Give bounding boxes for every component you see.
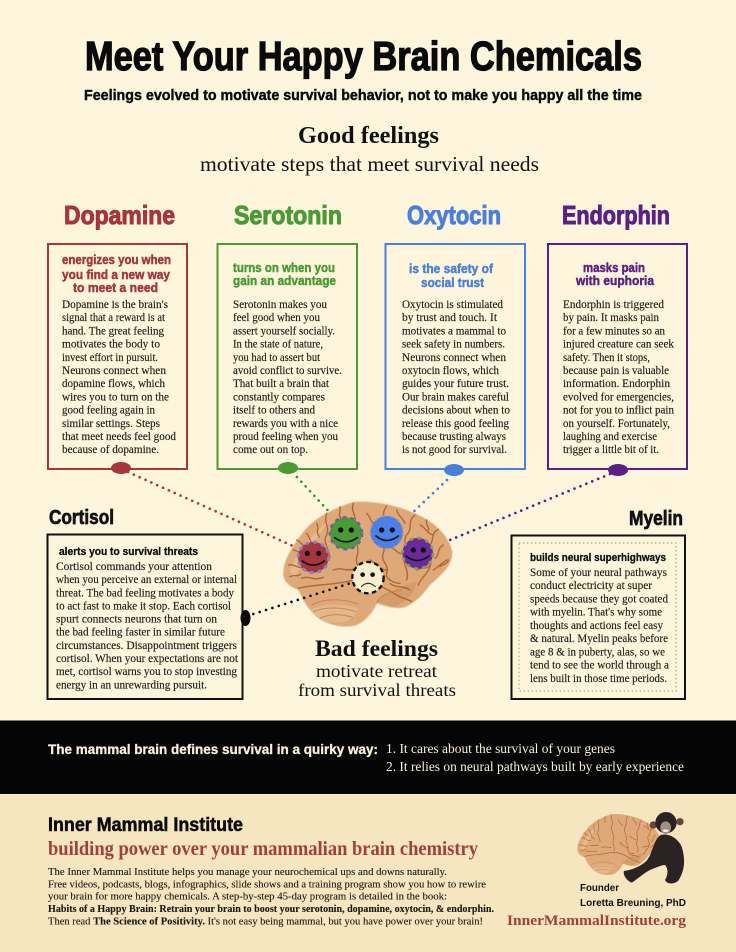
body text: oxytocin: by trust and touch. It xyxy=(402,312,498,324)
body text: cortisol: circumstances. Disappointment triggers xyxy=(56,640,238,652)
body text: endorphin: by pain. It masks pain xyxy=(563,312,659,324)
connector: dopamine xyxy=(128,472,293,546)
connector: oxytocin xyxy=(408,480,447,517)
text: motivate retreat: from survival threats xyxy=(298,680,456,700)
body text: myelin: thoughts and actions feel easy xyxy=(530,620,663,632)
heading: dopamine: Dopamine xyxy=(64,200,175,230)
body text: cortisol: spurt connects neurons that turn on xyxy=(56,614,217,626)
body text: oxytocin: Oxytocin is stimulated xyxy=(402,299,503,311)
body text: dopamine: motivates the body to xyxy=(62,339,160,351)
body text: endorphin: trigger a little bit of it. xyxy=(563,444,659,456)
founder credit: Founder xyxy=(580,882,619,894)
icon: chimp xyxy=(624,812,684,883)
body text: serotonin: In the state of nature, xyxy=(233,339,323,351)
footer paragraph xyxy=(48,866,494,927)
band list xyxy=(386,741,684,774)
heading: good feelings: Good feelings xyxy=(298,123,439,149)
body text: dopamine: similar settings. Steps xyxy=(62,418,161,430)
body text: oxytocin: motivates a mammal to xyxy=(402,325,506,337)
icon: small brain xyxy=(577,814,660,875)
band list: 2. It relies on neural pathways built by early experience xyxy=(386,759,684,774)
body text: dopamine: invest effort in pursuit. xyxy=(62,352,158,364)
box: cortisol xyxy=(48,534,242,699)
body text: serotonin: That built a brain that xyxy=(233,378,330,390)
body text: myelin: age 8 & in puberty, alas, so we xyxy=(530,646,665,658)
footer paragraph: Habits of a Happy Brain: Retrain your brain to boost your serotonin, dopamine, oxytocin, & endorphin. xyxy=(48,903,494,915)
body text: dopamine xyxy=(62,299,176,456)
icon: endorphin smiley xyxy=(402,538,433,569)
body text: endorphin: on yourself. Fortunately, xyxy=(563,418,670,430)
body text: oxytocin: Neurons connect when xyxy=(402,352,506,364)
body text: myelin: lens built in those time periods. xyxy=(530,673,667,685)
founder credit xyxy=(580,882,686,909)
body text: cortisol: threat. The bad feeling motivates a body xyxy=(56,587,234,599)
subhead: myelin: builds neural superhighways xyxy=(530,552,666,564)
subhead: oxytocin xyxy=(409,262,494,290)
body text: dopamine: hand. The great feeling xyxy=(62,325,164,337)
subhead: oxytocin: social trust xyxy=(421,276,485,290)
subhead: serotonin xyxy=(233,261,336,288)
icon: dopamine smiley xyxy=(298,542,329,573)
body text: endorphin: evolved for emergencies, xyxy=(563,391,674,403)
body text: serotonin: assert yourself socially. xyxy=(233,325,335,337)
body text: myelin: with myelin. That's why some xyxy=(530,607,662,619)
body text: cortisol xyxy=(56,561,239,691)
icon: serotonin smiley xyxy=(330,517,362,549)
body text: endorphin xyxy=(563,299,674,456)
website: InnerMammalInstitute.org xyxy=(507,913,687,929)
body text: dopamine: that meet needs feel good xyxy=(62,431,176,443)
founder credit: Loretta Breuning, PhD xyxy=(580,897,686,909)
dotted inner frame: myelin xyxy=(519,543,676,691)
heading: endorphin: Endorphin xyxy=(562,200,670,230)
body text: serotonin: feel good when you xyxy=(233,312,320,324)
subtitle: Feelings evolved to motivate survival behavior, not to make you happy all the time xyxy=(84,87,642,104)
body text: myelin: conduct electricity at super xyxy=(530,580,652,592)
text: motivate retreat xyxy=(298,661,456,700)
panel: myelin xyxy=(512,508,685,699)
body text: cortisol: cortisol. When your expectations are not xyxy=(56,653,239,665)
illustration: brain with smiley faces xyxy=(253,502,452,627)
body text: myelin xyxy=(530,567,669,685)
body text: serotonin xyxy=(233,299,342,456)
body text: cortisol: to act fast to make it stop. Each cortisol xyxy=(56,600,231,612)
text: motivate steps: motivate steps that meet survival needs xyxy=(200,152,539,176)
body text: endorphin: Endorphin is triggered xyxy=(563,299,664,311)
body text: serotonin: proud feeling when you xyxy=(233,431,338,443)
band: quirky survival xyxy=(0,720,736,794)
footer paragraph: The Inner Mammal Institute helps you manage your neurochemical ups and downs naturally. xyxy=(48,866,447,878)
heading: bad feelings: Bad feelings xyxy=(315,636,438,661)
box: serotonin xyxy=(218,244,357,469)
body text: dopamine: Neurons connect when xyxy=(62,365,166,377)
body text: myelin: & natural. Myelin peaks before xyxy=(530,633,668,645)
body text: cortisol: the bad feeling faster in similar future xyxy=(56,627,225,639)
body text: oxytocin: guides your future trust. xyxy=(402,378,509,390)
panel: dopamine xyxy=(48,200,187,474)
heading: myelin: Myelin xyxy=(629,508,683,530)
panel: cortisol xyxy=(48,507,250,699)
body text: endorphin: because pain is valuable xyxy=(563,365,669,377)
body text: endorphin: laughing and exercise xyxy=(563,431,657,443)
subhead: cortisol: alerts you to survival threats xyxy=(59,546,198,558)
title: Meet Your Happy Brain Chemicals xyxy=(85,33,642,79)
connector node: dopamine xyxy=(111,462,131,474)
footer tagline: building power over your mammalian brain chemistry xyxy=(48,838,478,860)
footer panel xyxy=(0,794,736,952)
body text: oxytocin: Our brain makes careful xyxy=(402,391,509,403)
panel: serotonin xyxy=(218,200,357,474)
body text: myelin: speeds because they got coated xyxy=(530,594,668,606)
band heading: The mammal brain defines survival in a quirky way: xyxy=(48,741,378,757)
connector: serotonin xyxy=(297,477,333,516)
subhead: endorphin xyxy=(575,261,655,288)
body text: dopamine: signal that a reward is at xyxy=(62,312,166,324)
body text: dopamine: because of dopamine. xyxy=(62,444,159,456)
footer heading: Inner Mammal Institute xyxy=(48,815,243,836)
footer paragraph: Free videos, podcasts, blogs, infographics, slide shows and a training program show you how to rewire xyxy=(48,878,486,890)
body text: serotonin: itself to others and xyxy=(233,405,315,417)
heading: cortisol: Cortisol xyxy=(49,507,114,529)
connector: cortisol xyxy=(253,583,350,614)
body text: serotonin: come out on top. xyxy=(233,444,308,456)
body text: myelin: Some of your neural pathways xyxy=(530,567,668,579)
panel: endorphin xyxy=(548,200,687,476)
body text: endorphin: information. Endorphin xyxy=(563,378,670,390)
body text: oxytocin: decisions about when to xyxy=(402,405,510,417)
subhead: endorphin: with euphoria xyxy=(575,274,655,288)
panel: oxytocin xyxy=(386,200,525,476)
body text: serotonin: constantly compares xyxy=(233,391,326,403)
connector node: oxytocin xyxy=(444,464,464,476)
subhead: dopamine: energizes you when xyxy=(62,253,171,267)
body text: endorphin: not for you to inflict pain xyxy=(563,405,674,417)
connector: endorphin xyxy=(433,474,610,547)
subhead: serotonin: turns on when you xyxy=(233,261,335,275)
box: oxytocin xyxy=(386,244,525,469)
body text: endorphin: for a few minutes so an xyxy=(563,325,665,337)
body text: oxytocin: seek safety in numbers. xyxy=(402,339,505,351)
body text: endorphin: injured creature can seek xyxy=(563,339,674,351)
body text: dopamine: wires you to turn on the xyxy=(62,391,169,403)
body text: oxytocin: oxytocin flows, which xyxy=(402,365,499,377)
text: motivate retreat: motivate retreat xyxy=(316,661,437,681)
body text: serotonin: rewards you with a nice xyxy=(233,418,338,430)
subhead: dopamine xyxy=(62,253,171,295)
body text: oxytocin: is not good for survival. xyxy=(402,444,507,456)
body text: serotonin: Serotonin makes you xyxy=(233,299,327,311)
subhead: endorphin: masks pain xyxy=(583,261,645,275)
heading: oxytocin: Oxytocin xyxy=(407,200,501,230)
body text: oxytocin: release this good feeling xyxy=(402,418,509,430)
body text: dopamine: Dopamine is the brain's xyxy=(62,299,169,311)
body text: serotonin: avoid conflict to survive. xyxy=(233,365,342,377)
body text: myelin: tend to see the world through a xyxy=(530,660,669,672)
box: myelin xyxy=(512,536,685,699)
subhead: dopamine: you find a new way xyxy=(62,268,170,282)
box: endorphin xyxy=(548,244,687,469)
connector node: cortisol xyxy=(240,610,250,626)
subhead: dopamine: to meet a need xyxy=(73,281,158,295)
icon: cortisol frown xyxy=(352,562,384,593)
body text: serotonin: you had to assert but xyxy=(233,352,321,364)
body text: cortisol: when you perceive an external or internal xyxy=(56,574,237,586)
body text: dopamine: good feeling again in xyxy=(62,405,155,417)
footer paragraph: Then read The Science of Positivity. It's not easy being mammal, but you have power over your brain! xyxy=(48,915,483,927)
box: dopamine xyxy=(48,244,187,469)
subhead: serotonin: gain an advantage xyxy=(233,274,336,288)
icon: oxytocin smiley xyxy=(370,516,403,549)
footer paragraph: your brain for more happy chemicals. A step-by-step 45-day program is detailed in the book: xyxy=(48,891,447,903)
body text: cortisol: met, cortisol warns you to stop investing xyxy=(56,666,237,678)
body text: cortisol: Cortisol commands your attention xyxy=(56,561,212,573)
body text: oxytocin: because trusting always xyxy=(402,431,507,443)
connector node: endorphin xyxy=(608,464,628,476)
body text: cortisol: energy in an unrewarding pursuit. xyxy=(56,679,207,691)
body text: dopamine: dopamine flows, which xyxy=(62,378,165,390)
body text: endorphin: safety. Then it stops, xyxy=(563,352,650,364)
heading: serotonin: Serotonin xyxy=(234,200,342,230)
body text: oxytocin xyxy=(402,299,510,456)
connector node: serotonin xyxy=(278,462,298,474)
subhead: oxytocin: is the safety of xyxy=(409,262,494,276)
band list: 1. It cares about the survival of your genes xyxy=(386,741,615,756)
